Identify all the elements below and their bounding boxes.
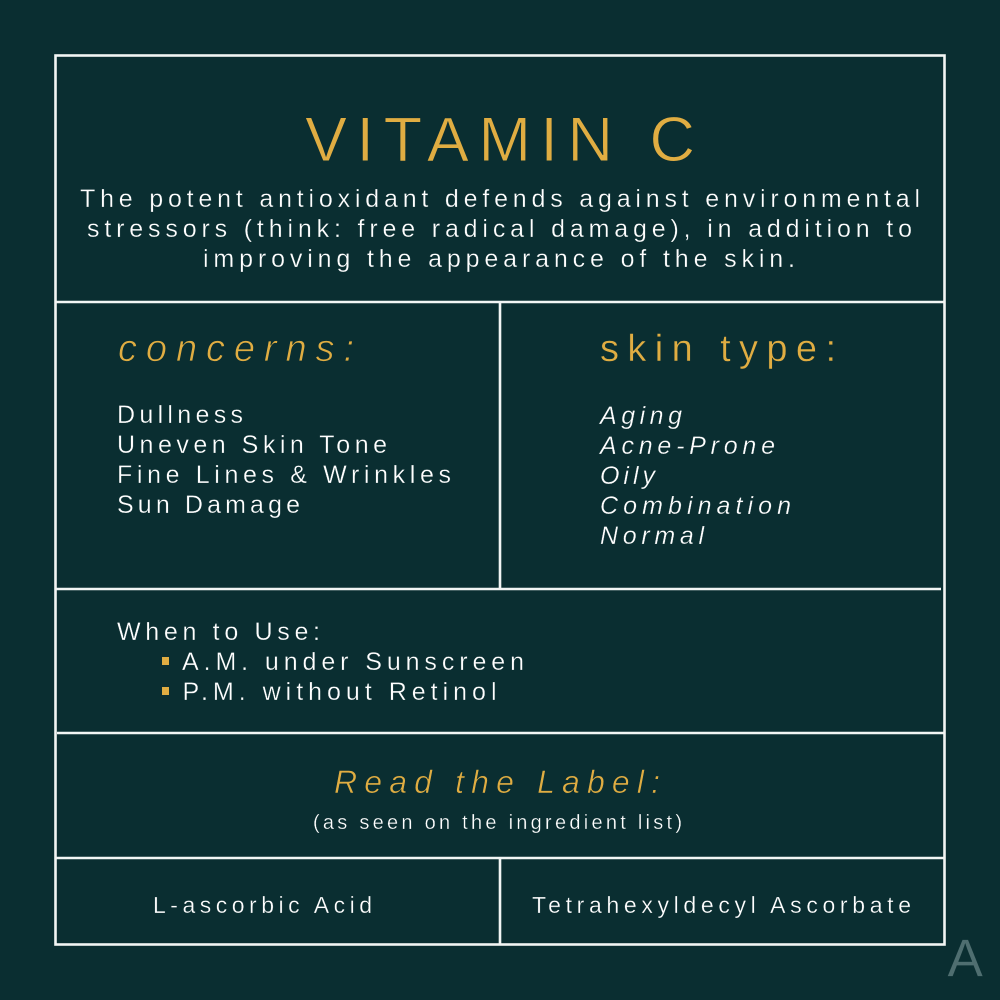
- read the label heading: Read the Label:: [334, 764, 660, 800]
- panel: concerns: [117, 328, 451, 519]
- concerns list: Sun Damage: [117, 491, 300, 519]
- ingredient name: Tetrahexyldecyl Ascorbate: [532, 892, 911, 918]
- skin type list: [598, 402, 791, 550]
- skin type heading: skin type:: [600, 328, 836, 370]
- concerns list: Fine Lines & Wrinkles: [117, 461, 451, 489]
- intro text block: [80, 185, 920, 273]
- skin type list: Normal: [600, 522, 705, 550]
- ingredient name: L-ascorbic Acid: [153, 892, 372, 918]
- concerns heading: concerns:: [118, 328, 354, 370]
- panel: when to use: [117, 618, 524, 706]
- bullet: A.M.: A.M. under Sunscreen: [182, 648, 524, 676]
- title: VITAMIN C: [305, 105, 695, 175]
- intro text block: improving the appearance of the skin.: [203, 245, 795, 273]
- skin type list: Acne-Prone: [598, 432, 775, 460]
- concerns list: Dullness: [117, 401, 243, 429]
- concerns list: Uneven Skin Tone: [117, 431, 387, 459]
- label subtitle: (as seen on the ingredient list): [313, 812, 682, 834]
- bullet: P.M.: P.M. without Retinol: [182, 678, 497, 706]
- watermark logo: A: [948, 929, 984, 988]
- panel: header: [80, 105, 920, 273]
- when to use heading: When to Use:: [117, 618, 320, 646]
- skin type list: Oily: [600, 462, 656, 490]
- intro text block: The potent antioxidant defends against environmental: [80, 185, 920, 213]
- panel: read the label: [313, 764, 682, 834]
- concerns list: [117, 401, 451, 519]
- skin type list: Combination: [600, 492, 791, 520]
- intro text block: stressors (think: free radical damage), in addition to: [87, 215, 912, 243]
- skin type list: Aging: [598, 402, 682, 430]
- panel: skin type: [598, 328, 836, 550]
